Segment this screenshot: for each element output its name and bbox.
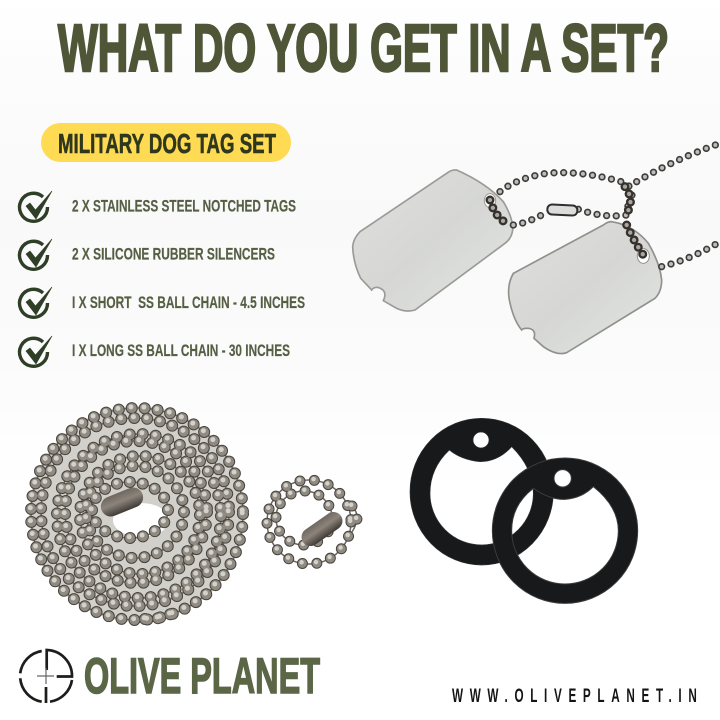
icon: check 4 xyxy=(20,336,52,366)
long ball chain coil xyxy=(29,406,245,622)
item 1: 2 X STAINLESS STEEL NOTCHED TAGS xyxy=(72,196,296,216)
dog tags with chain xyxy=(353,143,720,354)
heading pill: military dog tag set: MILITARY DOG TAG SET xyxy=(58,128,276,159)
icon: check 1 xyxy=(20,191,52,221)
silencer 1 xyxy=(410,418,553,565)
clasp xyxy=(298,508,346,550)
icon: check 3 xyxy=(20,287,52,317)
logo xyxy=(20,648,320,704)
clasp xyxy=(98,484,146,520)
silencer 2 xyxy=(492,458,638,603)
icon: crosshair xyxy=(20,650,72,703)
wordmark: OLIVE PLANET xyxy=(84,648,320,704)
item 2: 2 X SILICONE RUBBER SILENCERS xyxy=(72,244,275,264)
tag 2 xyxy=(509,222,662,354)
rubber silencers xyxy=(410,418,638,603)
item 4: I X LONG SS BALL CHAIN - 30 INCHES xyxy=(72,341,290,360)
chain clasp xyxy=(547,204,578,216)
item 3: I X SHORT SS BALL CHAIN - 4.5 INCHES xyxy=(72,293,305,312)
tag 2 hole xyxy=(637,249,649,263)
icon: check 2 xyxy=(20,239,52,269)
coil backing xyxy=(29,406,245,622)
ball chain xyxy=(490,143,720,267)
tag 1 xyxy=(353,170,513,311)
short ball chain coil xyxy=(266,479,357,564)
checklist xyxy=(20,191,305,366)
heading pill: military dog tag set xyxy=(41,123,291,162)
website url: WWW.OLIVEPLANET.IN xyxy=(452,685,697,707)
tag 1 hole xyxy=(484,194,496,208)
